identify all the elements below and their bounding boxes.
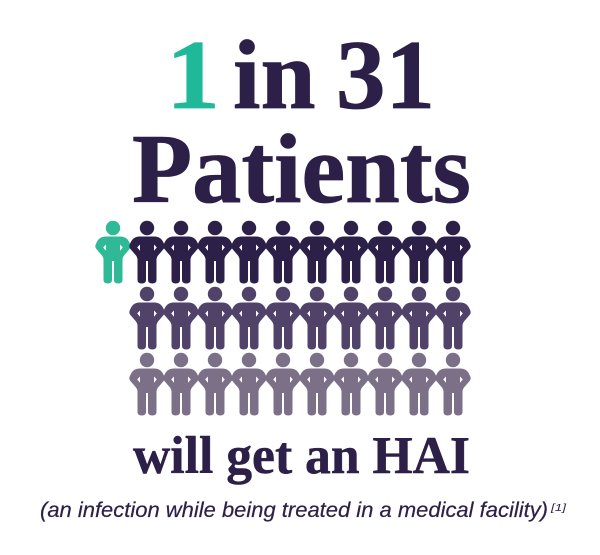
caption: (an infection while being treated in a medical facility) <box>40 499 548 522</box>
footnote marker: [1] <box>550 503 566 514</box>
heading: will get an HAI: will get an HAI <box>133 427 470 485</box>
icon: highlighted teal person <box>95 221 131 284</box>
title: 1 in 31 <box>166 21 435 130</box>
row 2: medium people <box>129 287 471 350</box>
pictogram: 31 people <box>95 221 471 416</box>
title: 1 in 31: 31 <box>336 21 435 130</box>
title: 1 in 31: 1 <box>166 21 220 130</box>
row 3: light people <box>129 353 471 416</box>
title: 1 in 31: in <box>233 21 316 130</box>
row 1: dark people <box>129 221 471 284</box>
title: Patients: Patients <box>132 115 471 224</box>
